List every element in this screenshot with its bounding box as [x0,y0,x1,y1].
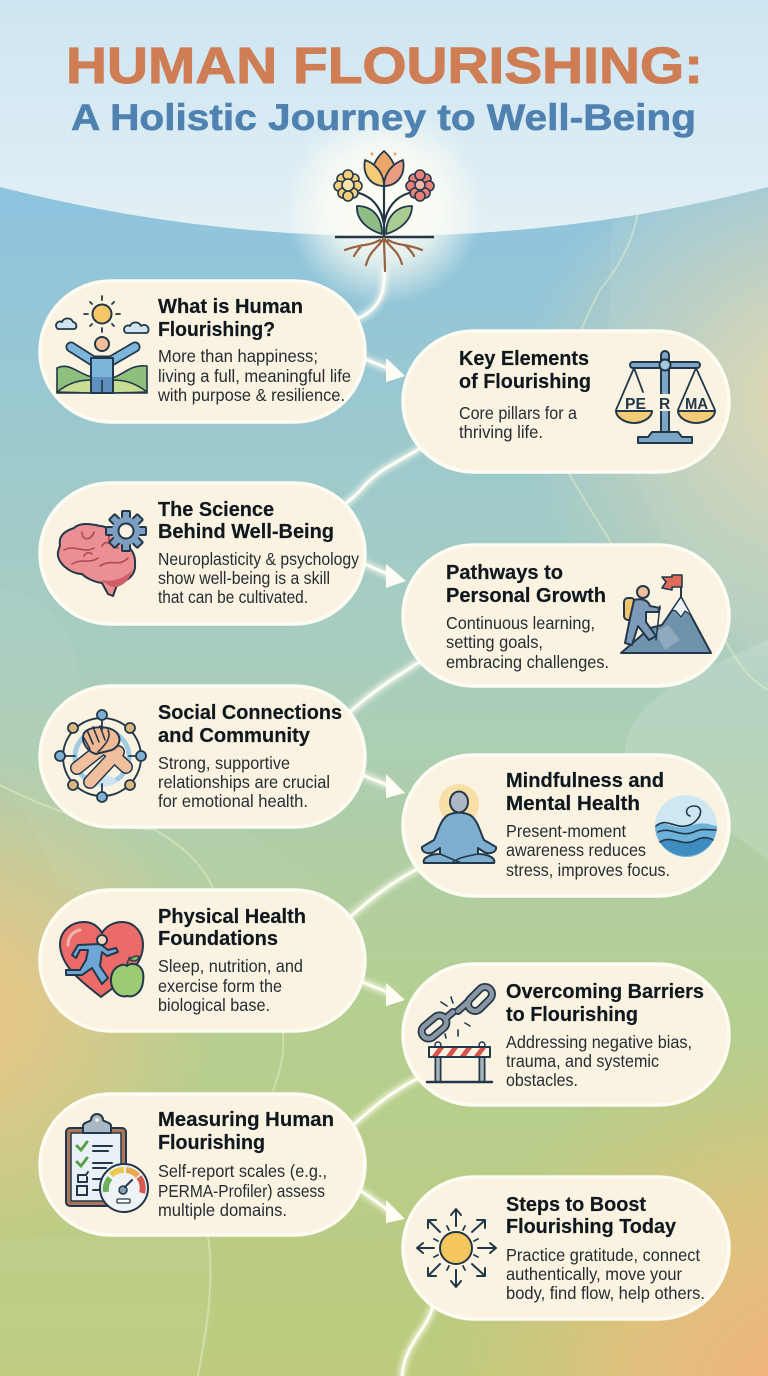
heading: Steps to Boost [506,1193,646,1216]
panel: pathways to personal growth [403,545,729,686]
title [66,37,703,138]
heading [158,905,306,950]
text block: show well-being is a skill [158,568,330,588]
text block: setting goals, [446,632,543,652]
text block: awareness reduces [506,840,646,860]
heading: Flourishing Today [506,1215,677,1238]
text block: that can be cultivated. [158,587,308,607]
icon: meditating figure [422,784,496,863]
heading: Physical Health [158,905,306,928]
icon: PERMA scales: MA [685,396,708,413]
text block [459,403,577,442]
text block: Self-report scales (e.g., [158,1161,327,1181]
panel: overcoming barriers [403,964,729,1105]
heading: of Flourishing [459,370,591,393]
icon: hiker and mountain [621,575,711,653]
flower glow [284,105,484,305]
heading: What is Human [158,295,303,318]
text block [158,1161,327,1220]
icon: clipboard and gauge [66,1114,148,1212]
text block [158,956,303,1015]
heading [459,347,591,393]
icon: person under sun [56,296,149,393]
text block: trauma, and systemic [506,1051,659,1071]
heading: to Flourishing [506,1003,638,1026]
heading: Flourishing [158,1131,265,1154]
text block: authentically, move your [506,1264,682,1284]
panel: key elements [403,331,729,472]
icon: broken chain and barrier [419,984,495,1082]
text block [157,346,351,405]
icon: flower with roots [334,151,434,271]
heading: Measuring Human [158,1108,334,1131]
heading: The Science [158,498,274,521]
text block: for emotional health. [158,791,308,811]
heading: Pathways to [446,561,563,584]
panel: social connections [40,686,365,827]
heading: Flourishing? [158,318,275,341]
text block [506,821,670,880]
heading [506,769,664,815]
heading: Overcoming Barriers [506,980,704,1003]
text block [158,549,359,607]
heading: Behind Well-Being [158,520,334,543]
text block: stress, improves focus. [506,860,670,880]
icon: heart, runner and apple [60,922,143,997]
text block: Strong, supportive [158,753,290,773]
text block: obstacles. [506,1070,578,1090]
heading [506,980,704,1026]
heading [158,1108,334,1154]
icon: clasped hands network [55,710,146,802]
icon: PERMA scales: R [659,396,670,413]
heading: Foundations [158,927,278,950]
text block: with purpose & resilience. [157,385,345,405]
text block: More than happiness; [158,346,318,366]
panel: measuring [40,1094,365,1235]
text block: exercise form the [158,976,282,996]
text block: embracing challenges. [446,652,609,672]
icon: PERMA scales [616,351,715,443]
icon: radiating sun [417,1209,496,1287]
icon: PERMA scales: PE [625,396,646,413]
title: A Holistic Journey to Well-Being [71,97,696,138]
panel: mindfulness [403,755,729,896]
text block: living a full, meaningful life [158,366,351,386]
text block: body, find flow, help others. [506,1283,705,1303]
heading: Mindfulness and [506,769,664,792]
text block: biological base. [158,995,270,1015]
icon: brain and gear [58,511,146,596]
header arc [0,0,768,236]
heading [506,1193,677,1238]
text block: Neuroplasticity & psychology [158,549,359,569]
text block: Sleep, nutrition, and [158,956,303,976]
title: HUMAN FLOURISHING: [66,37,703,94]
panel: science behind well-being [40,483,365,624]
heading [158,295,303,341]
heading: Personal Growth [446,584,606,607]
text block: multiple domains. [158,1200,287,1220]
text block [506,1032,692,1090]
text block [506,1245,705,1303]
text block: Core pillars for a [459,403,577,423]
text block: relationships are crucial [158,772,330,792]
heading [158,498,334,543]
panel: physical health [40,890,365,1031]
text block: thriving life. [459,422,543,442]
panel: what is human flourishing [40,281,365,422]
text block: PERMA-Profiler) assess [158,1181,325,1201]
icon: wave [655,795,717,857]
text block: Present-moment [506,821,626,841]
text block [158,753,330,811]
panel: steps to boost [403,1177,729,1319]
journey path [335,270,434,1376]
text block: Practice gratitude, connect [506,1245,700,1265]
heading: Key Elements [459,347,589,370]
heading: Social Connections [158,701,342,724]
text block: Continuous learning, [446,613,595,633]
heading: Mental Health [506,792,640,815]
heading [158,701,342,747]
heading: and Community [158,724,311,747]
heading [446,561,606,607]
text block [446,613,609,672]
text block: Addressing negative bias, [506,1032,692,1052]
